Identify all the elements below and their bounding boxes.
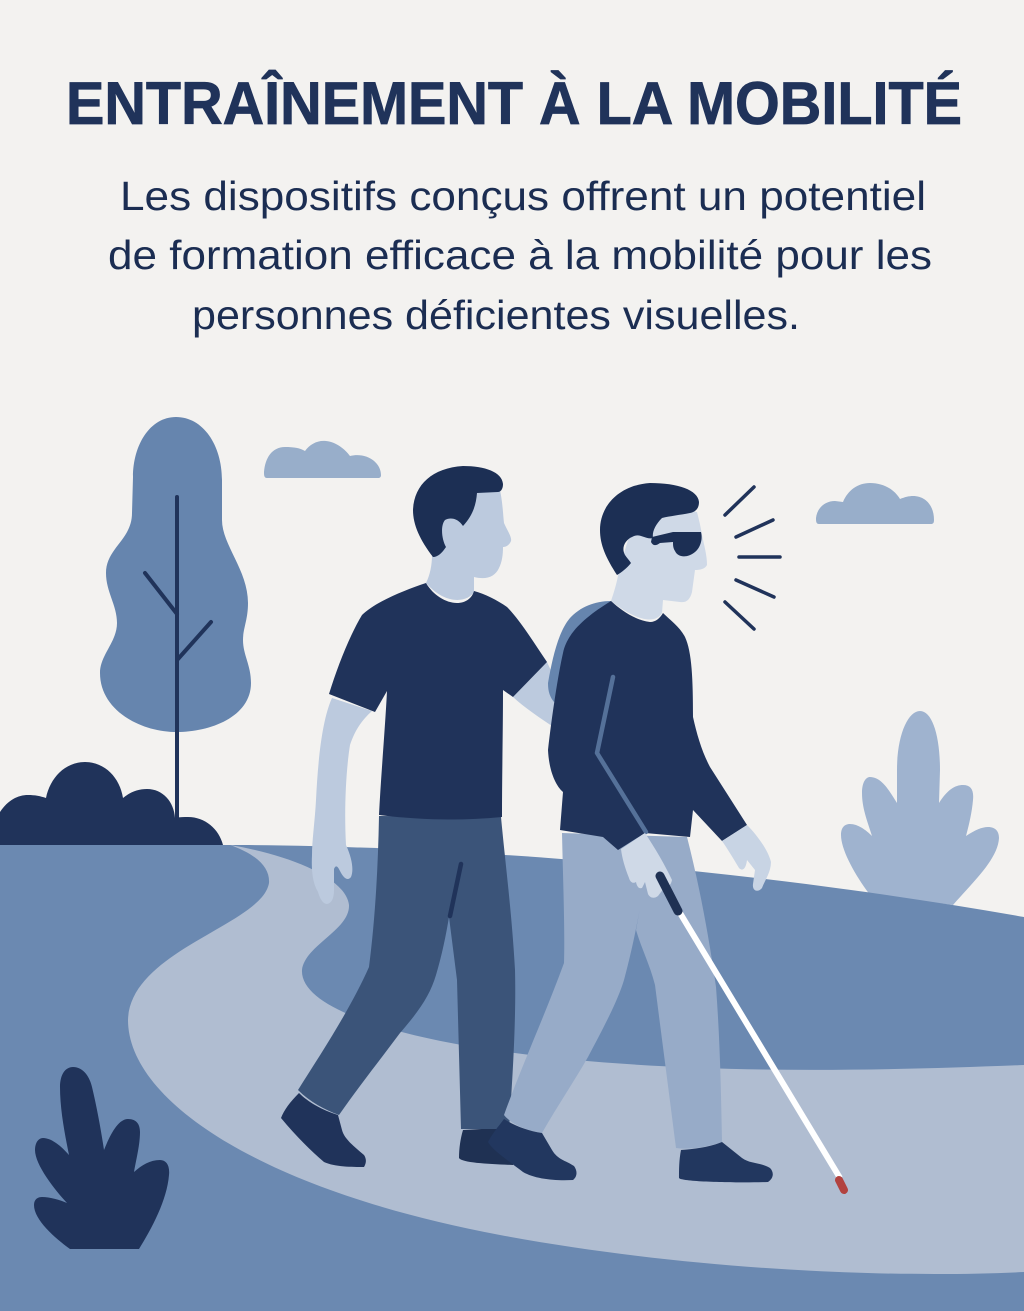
intro text block: de formation efficace à la mobilité pour les bbox=[108, 232, 932, 278]
far hand bbox=[722, 825, 771, 891]
right plant bbox=[841, 711, 999, 905]
guide trousers bbox=[298, 816, 515, 1129]
tree bbox=[100, 417, 251, 822]
bush bbox=[0, 762, 223, 845]
ground bbox=[0, 845, 1024, 1311]
sweater bbox=[548, 601, 747, 850]
cane shaft bbox=[680, 913, 840, 1178]
guide hanging arm bbox=[312, 698, 372, 904]
figure: visually impaired person bbox=[488, 483, 844, 1190]
sleeve crease bbox=[597, 677, 646, 832]
intro text block bbox=[108, 173, 932, 338]
cane grip bbox=[660, 876, 678, 911]
near hand bbox=[621, 833, 672, 898]
cane tip bbox=[839, 1180, 844, 1190]
guide far leg shoe bbox=[459, 1128, 520, 1165]
bottom-left plant bbox=[34, 1067, 169, 1249]
white cane bbox=[660, 876, 844, 1190]
cloud left bbox=[264, 441, 381, 478]
trousers bbox=[504, 833, 722, 1149]
walking path bbox=[128, 845, 1024, 1274]
guide neck and face bbox=[426, 490, 511, 600]
guide t-shirt bbox=[329, 583, 547, 819]
voice lines bbox=[725, 487, 780, 629]
sunglasses bbox=[651, 532, 702, 556]
guide arm on shoulder bbox=[513, 662, 560, 728]
title: ENTRAÎNEMENT À LA MOBILITÉ bbox=[66, 70, 962, 137]
intro text block: personnes déficientes visuelles. bbox=[192, 292, 800, 338]
figure: sighted guide bbox=[281, 466, 560, 1167]
hair bbox=[600, 483, 699, 575]
far shoe bbox=[679, 1142, 773, 1182]
guide pocket line bbox=[450, 864, 461, 916]
cloud right bbox=[816, 483, 934, 524]
backpack strap bbox=[548, 601, 615, 702]
guide hair bbox=[413, 466, 503, 557]
neck and face bbox=[611, 500, 707, 619]
near shoe bbox=[488, 1119, 576, 1180]
guide near shoe bbox=[281, 1093, 366, 1167]
intro text block: Les dispositifs conçus offrent un potentiel bbox=[120, 173, 926, 219]
